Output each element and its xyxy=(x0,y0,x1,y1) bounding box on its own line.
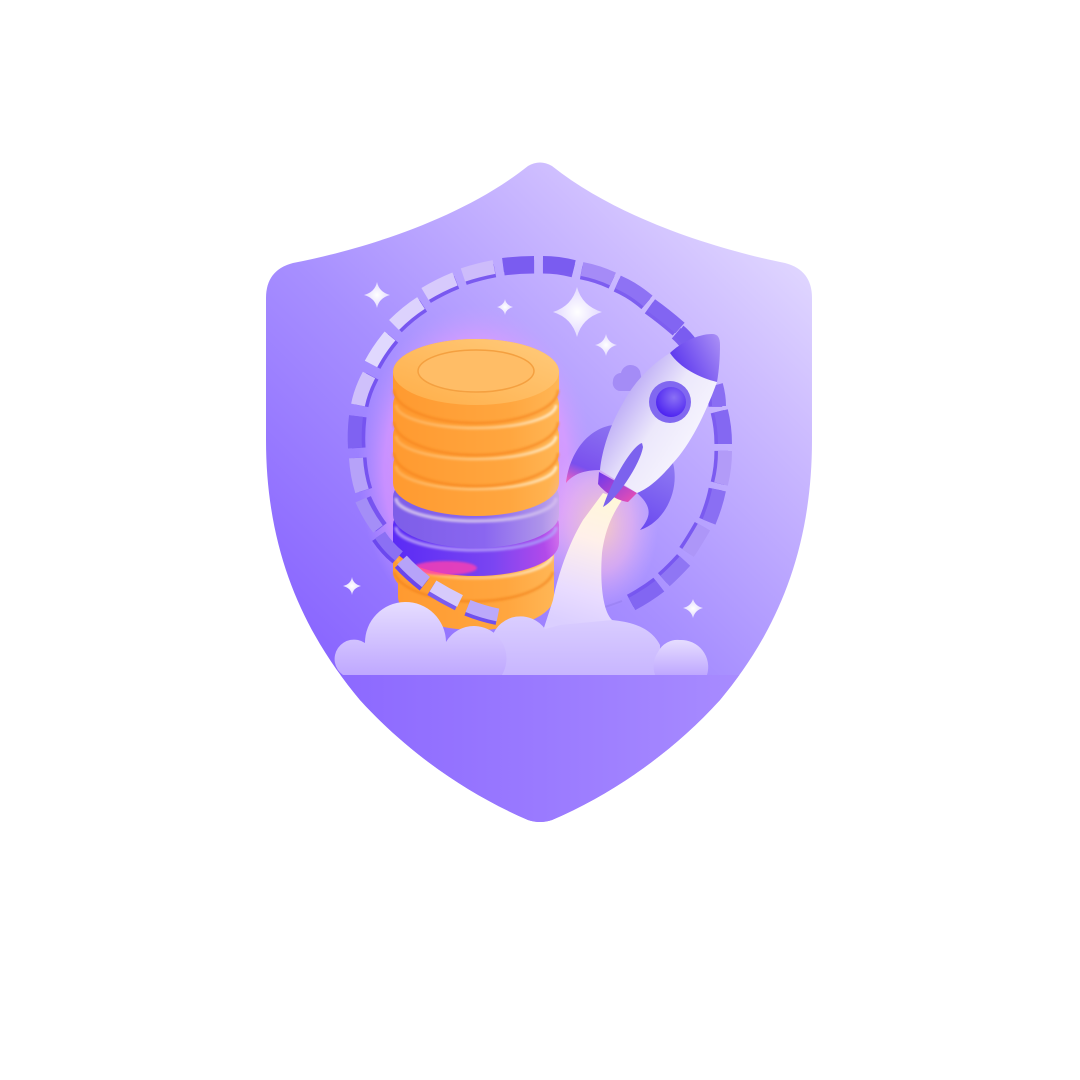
centre fin xyxy=(603,443,643,507)
clouds and exhaust plume xyxy=(335,493,708,675)
coin stack xyxy=(393,339,559,630)
engine base xyxy=(598,472,637,502)
glow behind coins xyxy=(358,305,594,635)
purple coin lower xyxy=(393,492,559,576)
rocket xyxy=(566,334,720,530)
nose cone xyxy=(670,334,720,382)
orange coin 5 xyxy=(393,521,554,605)
orange coin top xyxy=(393,339,559,423)
right cloud xyxy=(654,640,708,675)
sparkles xyxy=(343,282,703,618)
shield lower band xyxy=(340,675,740,822)
purple coin upper xyxy=(393,464,559,548)
dashed progress ring, over coins xyxy=(378,535,498,618)
rocket body xyxy=(600,353,717,493)
window xyxy=(649,381,691,423)
small cloud behind rocket xyxy=(613,365,644,391)
orange coin 4 xyxy=(393,432,559,516)
glow around rocket exhaust xyxy=(542,440,658,610)
orange coin 6 xyxy=(398,575,554,630)
left cloud xyxy=(335,602,506,675)
dashed progress ring, upper and right xyxy=(355,263,725,607)
illustration: shield badge with coins and rocket xyxy=(266,162,812,822)
orange coin 3 xyxy=(393,402,559,486)
middle cloud xyxy=(483,616,660,675)
right fin xyxy=(637,463,675,530)
exhaust flame xyxy=(540,493,660,650)
orange coin 2 xyxy=(393,371,559,455)
shield background xyxy=(266,162,812,822)
left fin xyxy=(566,425,613,483)
